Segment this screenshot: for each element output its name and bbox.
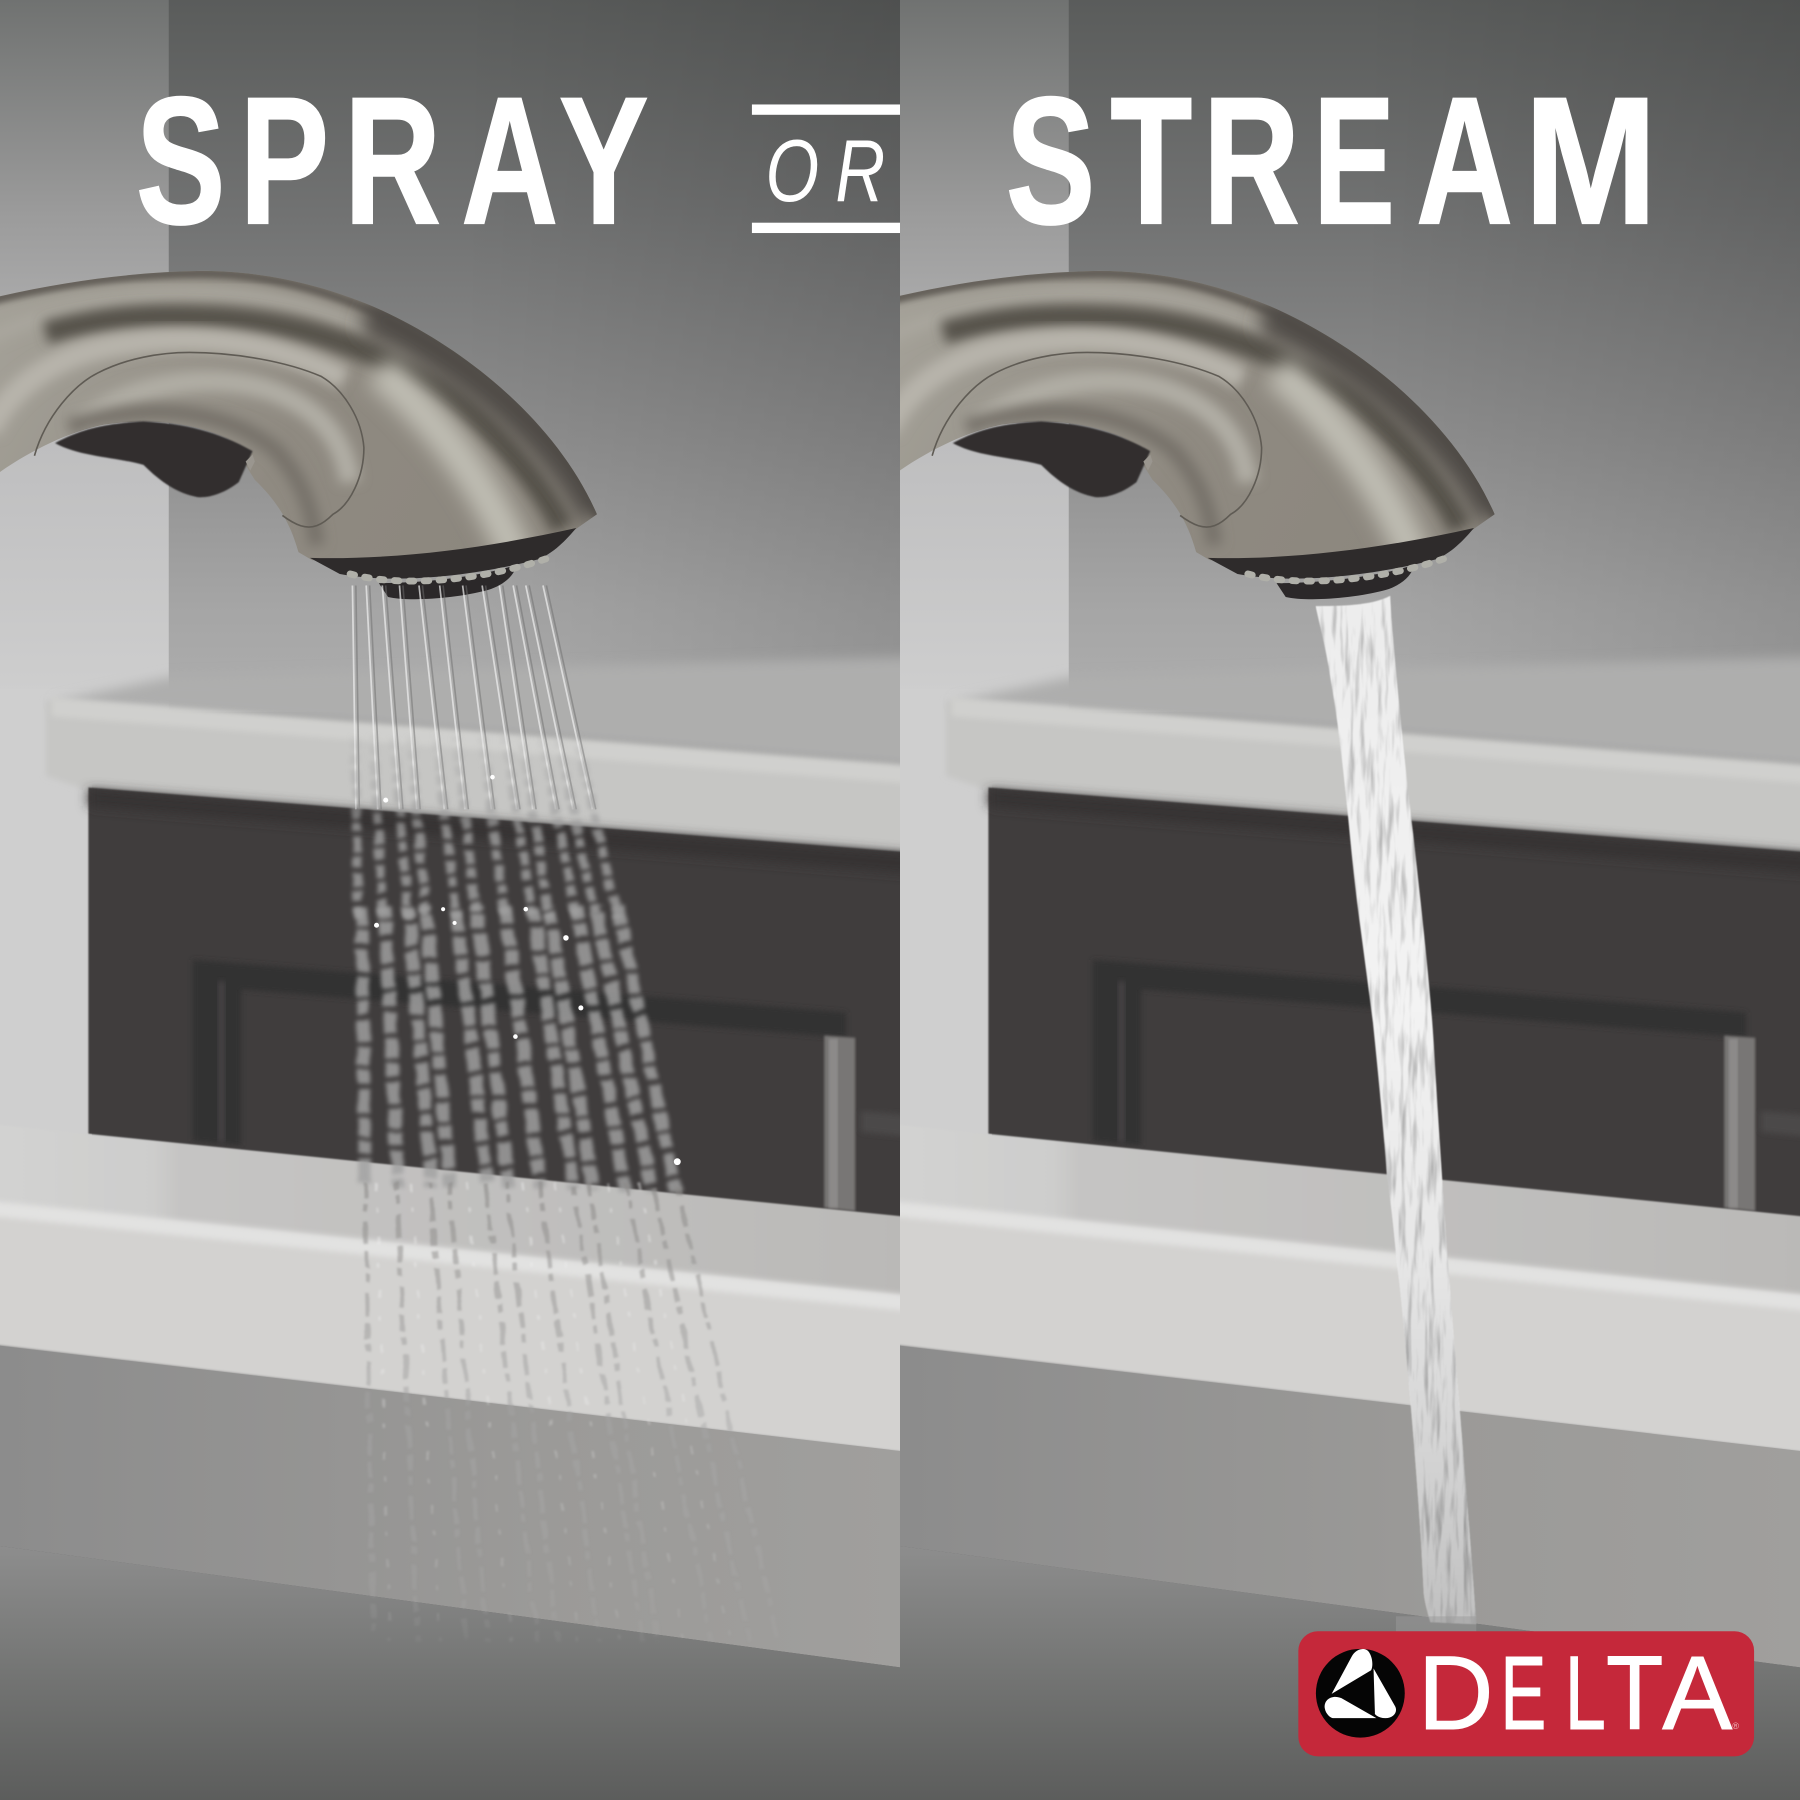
logo: Delta: ® — [1732, 1721, 1739, 1731]
logo: Delta: E — [1500, 1635, 1546, 1752]
heading: STREAM: STR — [1006, 60, 1300, 262]
logo: Delta: D — [1418, 1635, 1494, 1752]
logo: Delta: A — [1662, 1635, 1732, 1752]
panel: spray — [0, 0, 930, 1800]
icon: faucet spray head — [875, 271, 1497, 599]
panel: stream — [875, 0, 1800, 1800]
icon: Delta tri-drop mark — [1316, 1649, 1405, 1738]
heading: SPRAY: SPRAY — [136, 60, 648, 262]
stream of water — [1316, 596, 1476, 1624]
spray water jets — [349, 585, 733, 1619]
logo: Delta — [1298, 1631, 1754, 1756]
heading: STREAM: E — [1313, 60, 1395, 262]
logo: Delta: L — [1565, 1635, 1606, 1752]
kitchen background — [877, 0, 1800, 1800]
faint reflection of the stream — [1396, 1616, 1476, 1632]
icon: faucet spray head — [0, 271, 599, 599]
logo: Delta: T — [1606, 1635, 1663, 1752]
heading: STREAM: A — [1416, 60, 1513, 262]
heading: OR: OR — [766, 121, 885, 220]
kitchen background — [0, 0, 930, 1800]
heading: STREAM: M — [1524, 60, 1657, 262]
heading: OR — [752, 104, 900, 233]
